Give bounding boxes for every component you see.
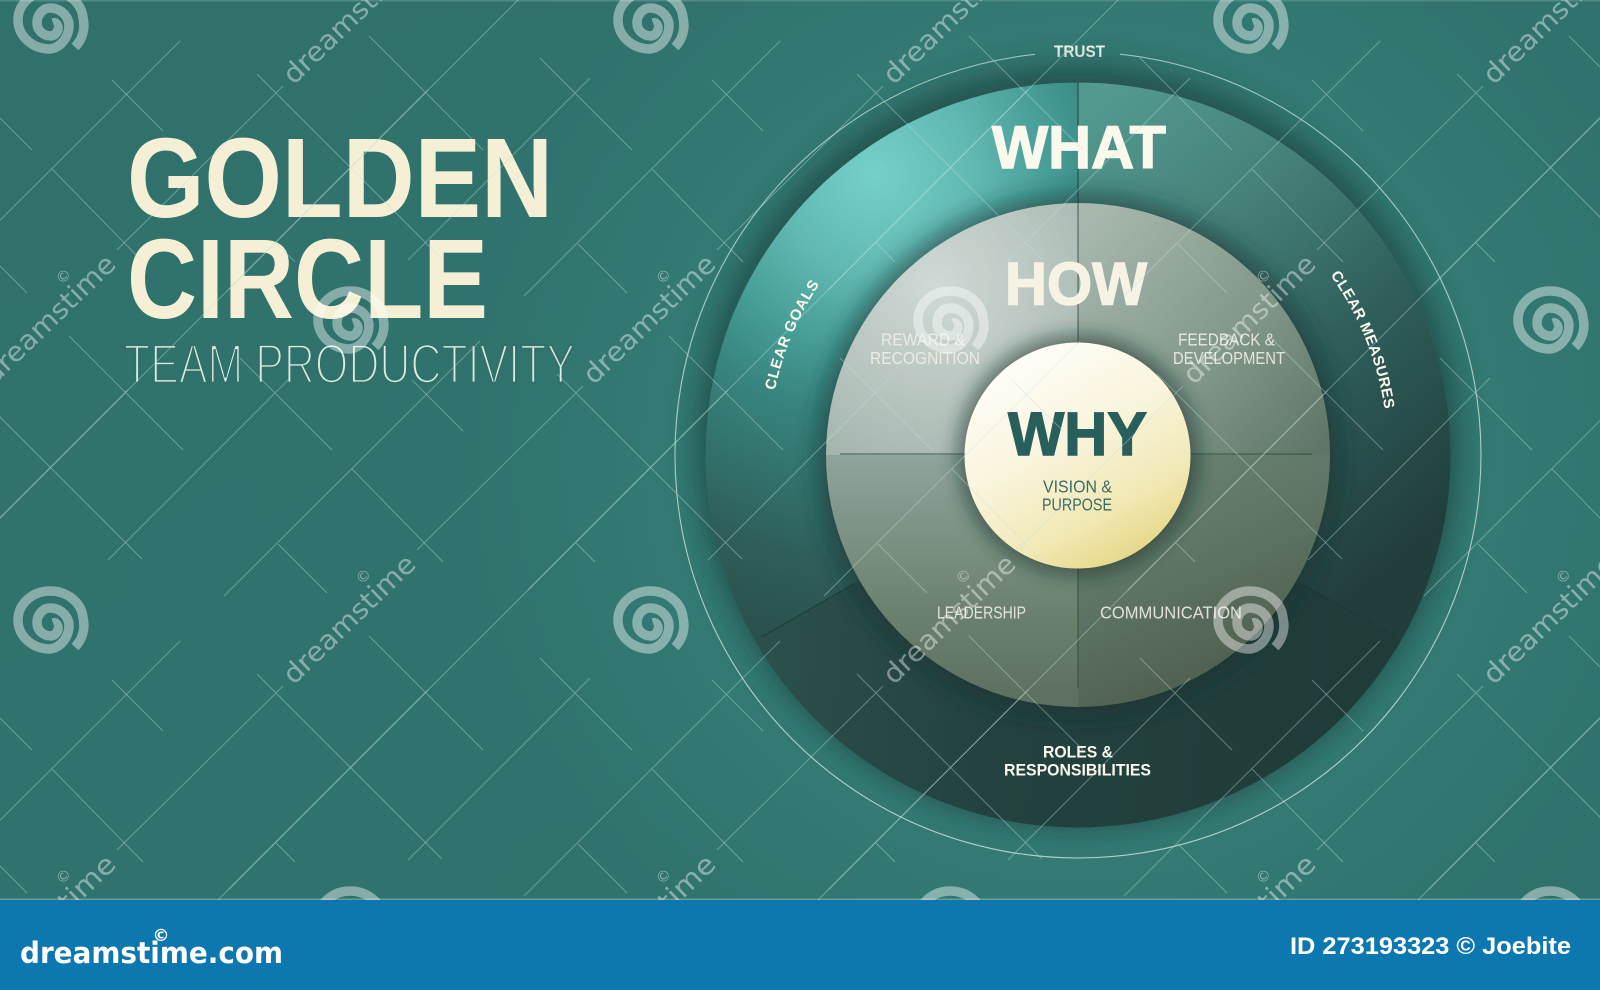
sector: clear goals bbox=[706, 82, 1078, 641]
what circle bbox=[706, 82, 1450, 828]
watermark wordmarks: dreamstime bbox=[277, 549, 422, 691]
title bbox=[124, 115, 575, 395]
footer logo mark: © bbox=[152, 926, 170, 946]
what dividers bbox=[762, 82, 1396, 637]
subtitle: TEAM PRODUCTIVITY bbox=[124, 332, 575, 395]
heading: how: HOW bbox=[1005, 250, 1147, 318]
label: leadership: LEADERSHIP bbox=[937, 602, 1026, 622]
shadow of why circle bbox=[957, 334, 1199, 576]
watermark wordmarks: time bbox=[52, 849, 122, 918]
heading: what: WHAT bbox=[992, 114, 1166, 181]
label: clear measures: CLEAR MEASURES bbox=[1332, 271, 1394, 408]
label: clear goals: CLEAR GOALS bbox=[766, 280, 818, 389]
watermark wordmarks: dreamstime bbox=[1177, 249, 1322, 391]
label: vision and purpose bbox=[1042, 476, 1112, 514]
outer thin ring: trust bbox=[675, 54, 1481, 858]
heading: why: WHY bbox=[1008, 400, 1147, 468]
how quadrant bottom right bbox=[1078, 455, 1330, 707]
title line: circle: CIRCLE bbox=[127, 216, 488, 342]
shadow of outer circle bbox=[697, 66, 1459, 828]
label: reward and recognition bbox=[870, 330, 980, 368]
how quadrant top right bbox=[1078, 203, 1330, 455]
watermark wordmarks: © bbox=[352, 565, 375, 588]
golden circle diagram bbox=[674, 43, 1482, 858]
label: feedback and development bbox=[1173, 330, 1285, 368]
label: feedback and development: DEVELOPMENT bbox=[1173, 348, 1285, 368]
label: vision and purpose: VISION & bbox=[1043, 476, 1112, 496]
watermark wordmarks: time bbox=[1252, 849, 1322, 918]
why disc bbox=[964, 342, 1190, 568]
watermark wordmarks: © bbox=[652, 265, 675, 288]
footer image id: ID 273193323 © Joebite bbox=[1290, 933, 1571, 960]
watermark wordmarks: dreamstime bbox=[577, 249, 722, 391]
sector: clear measures bbox=[1078, 82, 1450, 641]
label: trust: TRUST bbox=[1054, 43, 1105, 61]
label: vision and purpose: PURPOSE bbox=[1042, 494, 1112, 514]
sector: roles and responsibilities bbox=[755, 455, 1401, 827]
watermark wordmarks: dreamstime bbox=[877, 549, 1022, 691]
label: reward and recognition: REWARD & bbox=[881, 330, 965, 350]
how dividers bbox=[840, 203, 1312, 688]
title line: golden: GOLDEN bbox=[127, 115, 553, 241]
footer bar bbox=[0, 900, 1600, 990]
watermark wordmarks: © bbox=[1252, 265, 1275, 288]
how quadrant bottom left bbox=[826, 455, 1078, 707]
label: reward and recognition: RECOGNITION bbox=[870, 348, 980, 368]
label: roles: ROLES & bbox=[1043, 742, 1113, 761]
watermark wordmarks: © bbox=[1252, 865, 1275, 888]
why circle bbox=[964, 342, 1190, 568]
watermark wordmarks: © bbox=[1552, 565, 1575, 588]
how quadrant top left bbox=[826, 203, 1078, 455]
shadow of how circle bbox=[816, 193, 1340, 717]
label: responsibilities: RESPONSIBILITIES bbox=[1004, 760, 1151, 779]
watermark wordmarks: © bbox=[52, 865, 75, 888]
watermark wordmarks: © bbox=[952, 565, 975, 588]
label: feedback and development: FEEDBACK & bbox=[1178, 330, 1275, 350]
watermark wordmarks: © bbox=[52, 265, 75, 288]
watermark wordmarks: time bbox=[652, 849, 722, 918]
watermark wordmarks: © bbox=[652, 865, 675, 888]
footer logo: dreamstime.com bbox=[20, 936, 283, 970]
label: communication: COMMUNICATION bbox=[1100, 602, 1242, 622]
how circle bbox=[826, 203, 1330, 707]
